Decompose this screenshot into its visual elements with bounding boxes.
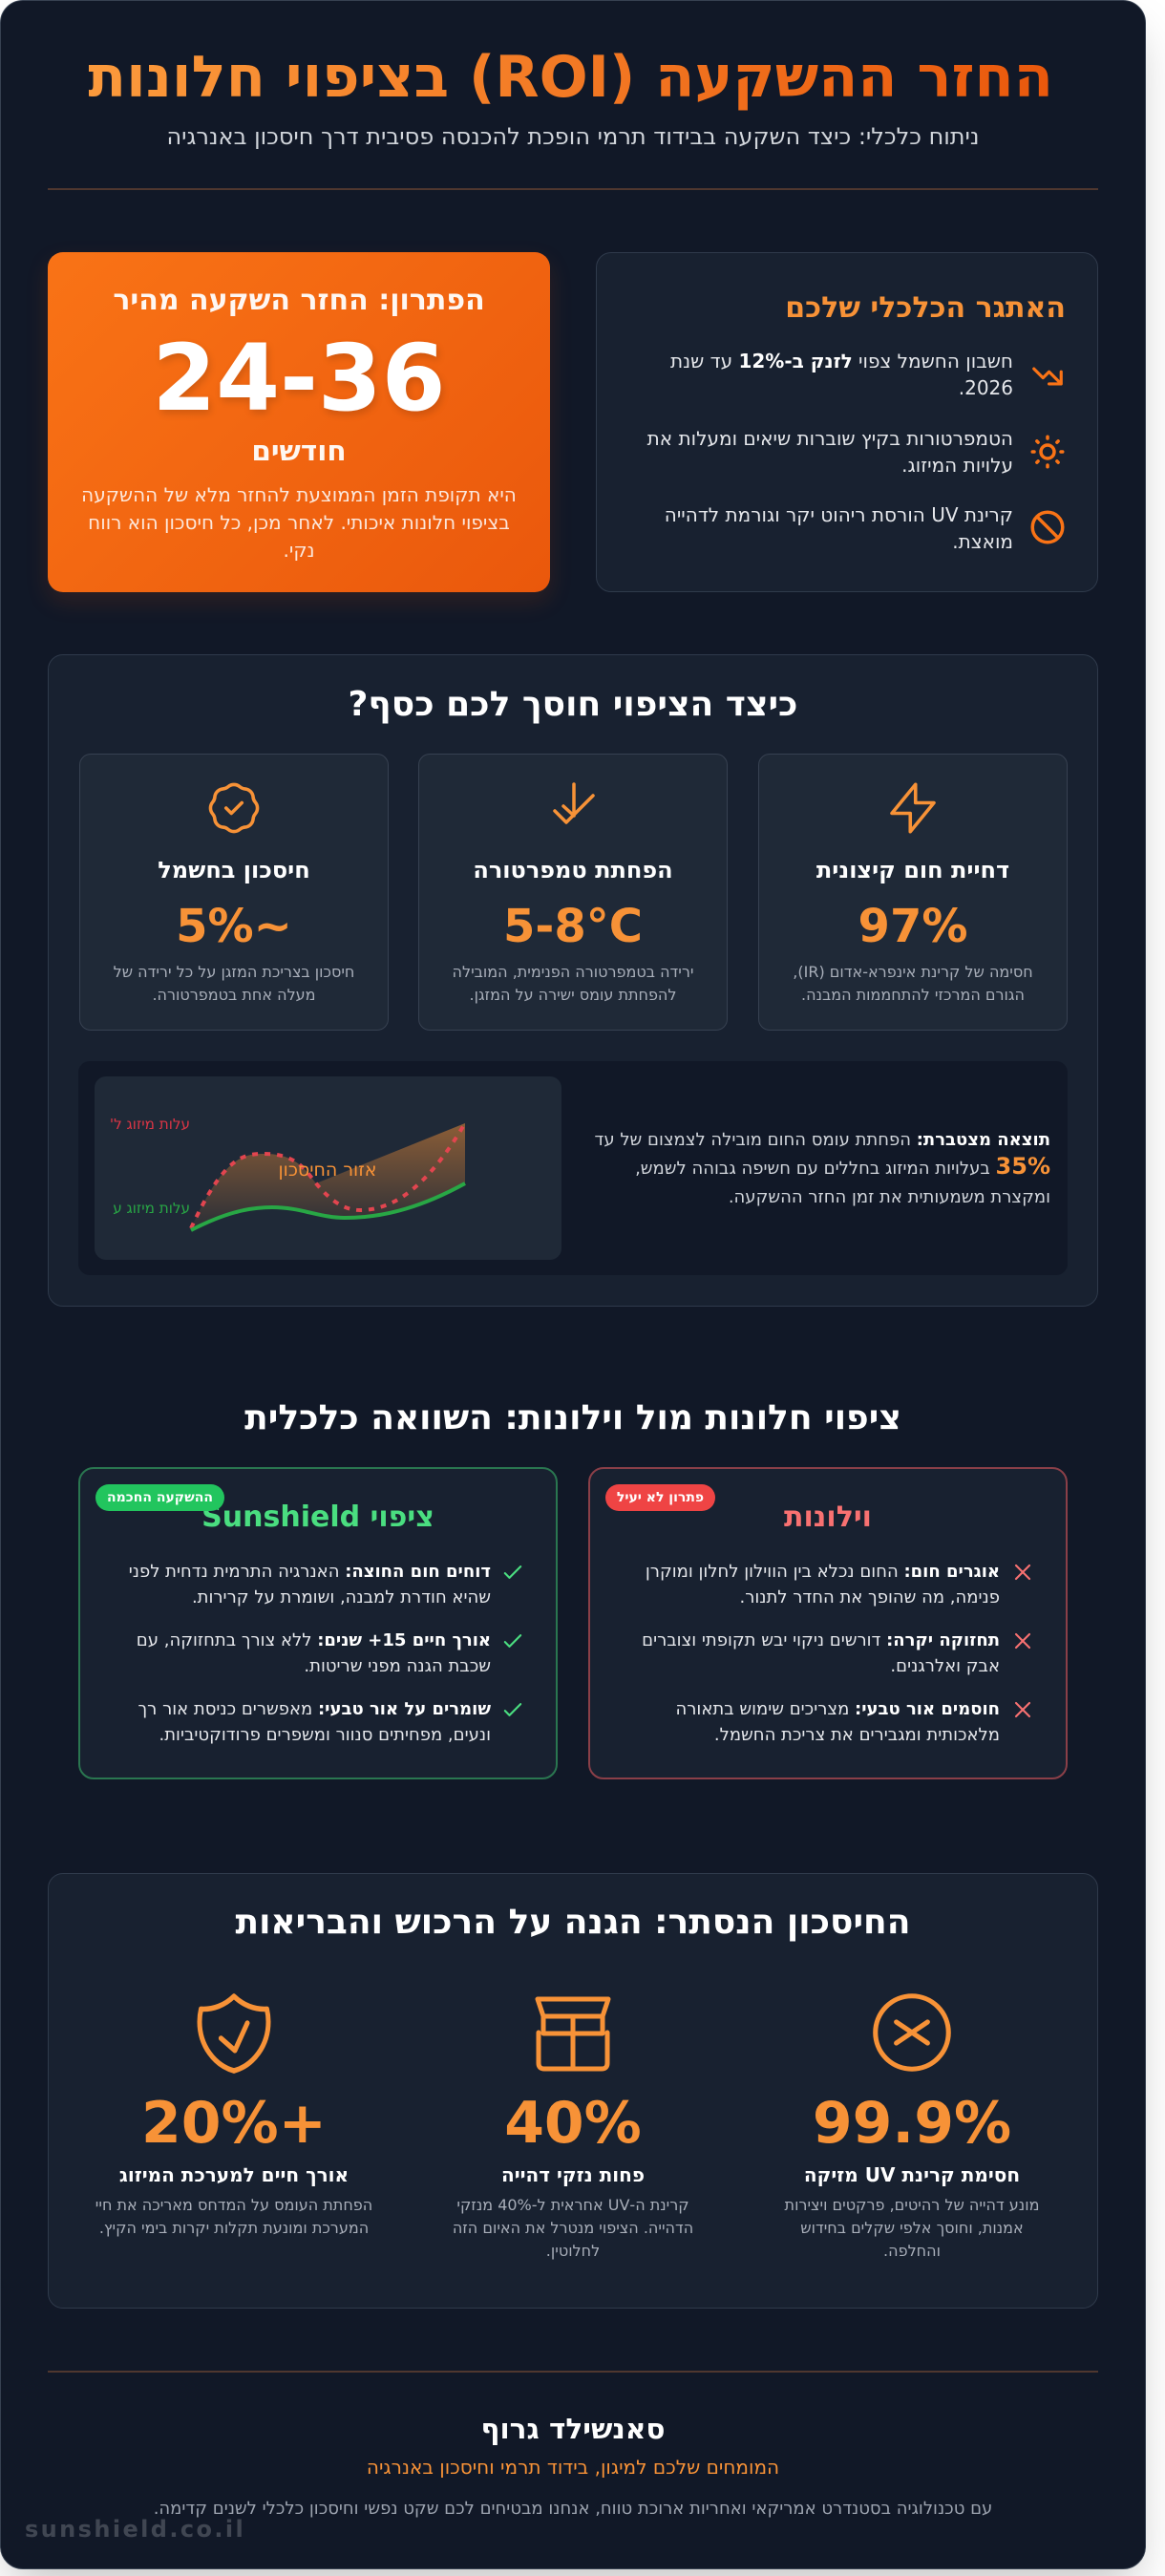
challenge item: bill: חשבון החשמל צפוי לזנק ב-12% עד שנת <box>670 350 1013 373</box>
result text: ומקצרת משמעותית את זמן החזר ההשקעה. <box>729 1187 1050 1207</box>
footer tagline: המומחים שלכם למיגון, בידוד תרמי וחיסכון באנרגיה <box>367 2456 779 2479</box>
card title: דחיית חום קיצונית <box>816 857 1009 884</box>
icon: lightning <box>890 783 936 833</box>
stat description: קרינת ה-UV אחראית ל-40% מנזקי <box>456 2196 689 2214</box>
sunshield heading: ציפוי Sunshield <box>201 1501 434 1534</box>
cumulative result box <box>78 1061 1068 1275</box>
stat description <box>453 2196 693 2260</box>
stat description: הפחתת העומס על המדחס מאריכה את חיי <box>95 2196 372 2214</box>
sunshield item 1: שהיא חודרת למבנה, ושומרת על קרירות. <box>192 1587 491 1607</box>
stat title: פחות נזקי דהייה <box>501 2163 645 2186</box>
panel: how coating saves money <box>48 654 1098 1307</box>
stat description: המערכת ומונעת תקלות יקרות בימי הקיץ. <box>99 2219 369 2237</box>
stat: AC lifespan <box>95 1993 372 2237</box>
stat description: הדהייה. הציפוי מנטרל את האיום הזה <box>453 2219 693 2237</box>
sunshield item 1: דוחים חום החוצה: האנרגיה התרמית נדחית לפני <box>129 1562 491 1582</box>
solution description: בציפוי חלונות איכותי. לאחר מכן, כל חיסכון הוא רווח <box>88 511 510 534</box>
icon: cross <box>1014 1633 1030 1649</box>
solution description: היא תקופת הזמן הממוצעת להחזר מלא של ההשקעה <box>81 483 517 506</box>
title: החזר ההשקעה (ROI) בציפוי חלונות <box>87 44 1053 111</box>
stat value: +20% <box>141 2090 327 2157</box>
challenge item: UV: מואצת. <box>952 530 1013 553</box>
card description: חיסכון בצריכת המזגן על כל ירידה של <box>114 963 354 981</box>
card description: להפחתת עומס ישירה על המזגן. <box>470 986 676 1004</box>
card title: חיסכון בחשמל <box>158 857 310 884</box>
sunshield item 2 <box>137 1630 491 1676</box>
card description: חסימה של קרינת אינפרא-אדום (IR), <box>793 963 1033 981</box>
icon: trending down <box>1032 367 1063 386</box>
panel: economic challenge <box>596 252 1098 592</box>
badge: not effective: פתרון לא יעיל <box>617 1490 704 1505</box>
card: temperature reduction <box>418 754 728 1031</box>
challenge item: temperature <box>647 427 1013 477</box>
stat description: מונע דהייה של רהיטים, פרקטים ויצירות <box>785 2196 1039 2214</box>
stat title: אורך חיים למערכת המיזוג <box>119 2163 349 2186</box>
badge: smart investment <box>95 1484 224 1511</box>
comparison heading: ציפוי חלונות מול וילונות: השוואה כלכלית <box>244 1398 901 1437</box>
panel: hidden savings <box>48 1873 1098 2309</box>
challenge item: UV: קרינת UV הורסת ריהוט יקר וגורמת לדהייה <box>665 503 1013 526</box>
subtitle: ניתוח כלכלי: כיצד השקעה בבידוד תרמי הופכת להכנסה פסיבית דרך חיסכון באנרגיה <box>166 123 980 150</box>
card: electricity saving <box>79 754 389 1031</box>
panel: curtains <box>588 1467 1068 1779</box>
chart: cooling cost savings <box>95 1076 561 1260</box>
icon: cross <box>1014 1702 1030 1717</box>
curtains item 1: פנימה, מה שהופך את החדר לתנור. <box>739 1587 1000 1607</box>
chart: cooling cost savings: עלות מיזוג ל' <box>110 1116 190 1133</box>
curtains item 1 <box>646 1562 1000 1607</box>
payback number: 24-36 <box>152 325 446 432</box>
sunshield item 3 <box>138 1699 491 1745</box>
icon: check <box>504 1703 521 1716</box>
icon: x circle <box>873 1993 951 2072</box>
challenge item: bill: 2026. <box>959 376 1013 399</box>
stat description <box>785 2196 1039 2260</box>
challenge item: bill <box>670 350 1013 399</box>
icon: check <box>504 1634 521 1648</box>
card description <box>453 963 693 1004</box>
badge: not effective <box>605 1484 715 1511</box>
solution description <box>81 483 517 562</box>
card value: 97% <box>858 900 967 953</box>
chart: cooling cost savings: אזור החיסכון <box>278 1160 377 1181</box>
chart: cooling cost savings: עלות מיזוג ע <box>113 1200 190 1217</box>
card value: 5-8°C <box>503 900 643 953</box>
stat: fading damage <box>453 1996 693 2260</box>
stat description: והחלפה. <box>883 2242 941 2260</box>
icon: shield check <box>197 1993 271 2074</box>
curtains item 1: אוגרים חום: החום נכלא בין הווילון לחלון ומוקרן <box>646 1562 1000 1582</box>
card description: ירידה בטמפרטורה הפנימית, המובילה <box>453 963 693 981</box>
watermark: sunshield.co.il <box>25 2516 245 2543</box>
icon: badge check <box>208 783 260 833</box>
curtains item 3: מלאכותית ומגבירים את צריכת החשמל. <box>714 1725 1000 1745</box>
sunshield item 3: שומרים על אור טבעי: מאפשרים כניסת אור רך <box>138 1699 491 1719</box>
result text: תוצאה מצטברת: הפחתת עומס החום מובילה לצמצום של עד <box>594 1130 1050 1150</box>
footer brand: סאנשילד גרוף <box>481 2413 665 2445</box>
footer note: עם טכנולוגיה בסטנדרט אמריקאי ואחריות ארוכת טווח, אנחנו מבטיחים לכם שקט נפשי וחיסכון כלכלי לשנים קדימה. <box>154 2499 992 2519</box>
icon: ban <box>1031 510 1064 544</box>
card: heat rejection <box>758 754 1068 1031</box>
sunshield item 2: שכבת הגנה מפני שריטות. <box>304 1656 491 1676</box>
section heading: החיסכון הנסתר: הגנה על הרכוש והבריאות <box>235 1903 911 1942</box>
months label: חודשים <box>251 435 347 467</box>
stat: UV blocking <box>785 1993 1039 2260</box>
icon: sun <box>1031 436 1064 468</box>
solution description: נקי. <box>283 539 315 562</box>
challenge item: UV <box>665 503 1013 553</box>
card value: ~5% <box>176 900 292 953</box>
challenge heading: האתגר הכלכלי שלכם <box>785 291 1066 325</box>
stat value: 99.9% <box>813 2090 1011 2157</box>
sunshield item 1 <box>129 1562 491 1607</box>
panel: Sunshield coating <box>78 1467 558 1779</box>
card description: מעלה אחת בטמפרטורה. <box>152 986 316 1004</box>
sunshield item 3: ונעים, מפחיתים סנוור ומשפרים פרודוקטיביות. <box>159 1725 491 1745</box>
card description <box>114 963 354 1004</box>
sunshield item 2: אורך חיים 15+ שנים: ללא צורך בתחזוקה, עם <box>137 1630 491 1650</box>
curtains item 2: אבק ואלרגנים. <box>890 1656 1000 1676</box>
solution heading: הפתרון: החזר השקעה מהיר <box>113 284 485 317</box>
curtains item 3 <box>676 1699 1000 1745</box>
card title: הפחתת טמפרטורה <box>473 857 673 884</box>
panel: solution payback <box>48 252 550 592</box>
card description: הגורם המרכזי להתחממות המבנה. <box>801 986 1025 1004</box>
icon: window <box>535 1996 611 2071</box>
curtains item 2: תחזוקה יקרה: דורשים ניקוי יבש תקופתי וצוברים <box>642 1630 1000 1650</box>
curtains item 2 <box>642 1630 1000 1676</box>
stat description: לחלוטין. <box>546 2242 600 2260</box>
icon: arrow down <box>553 782 595 824</box>
badge: smart investment: ההשקעה החכמה <box>107 1490 213 1505</box>
stat value: 40% <box>504 2090 642 2157</box>
result text <box>594 1130 1050 1207</box>
icon: cross <box>1014 1565 1031 1580</box>
curtains item 3: חוסמים אור טבעי: מצריכים שימוש בתאורה <box>676 1699 1000 1719</box>
section heading: כיצד הציפוי חוסך לכם כסף? <box>349 685 797 724</box>
curtains heading: וילונות <box>784 1501 872 1534</box>
icon: check <box>504 1565 521 1579</box>
challenge item: temperature: הטמפרטורות בקיץ שוברות שיאים ומעלות את <box>647 427 1013 450</box>
stat description <box>95 2196 372 2237</box>
stat title: חסימת קרינת UV מזיקה <box>804 2163 1020 2186</box>
challenge item: temperature: עלויות המיזוג. <box>901 454 1013 477</box>
result text: 35% בעלויות המיזוג בחללים עם חשיפה גבוהה לשמש, <box>635 1153 1050 1180</box>
stat description: אמנות, וחוסך אלפי שקלים בחידוש <box>800 2219 1024 2237</box>
card description <box>793 963 1033 1004</box>
